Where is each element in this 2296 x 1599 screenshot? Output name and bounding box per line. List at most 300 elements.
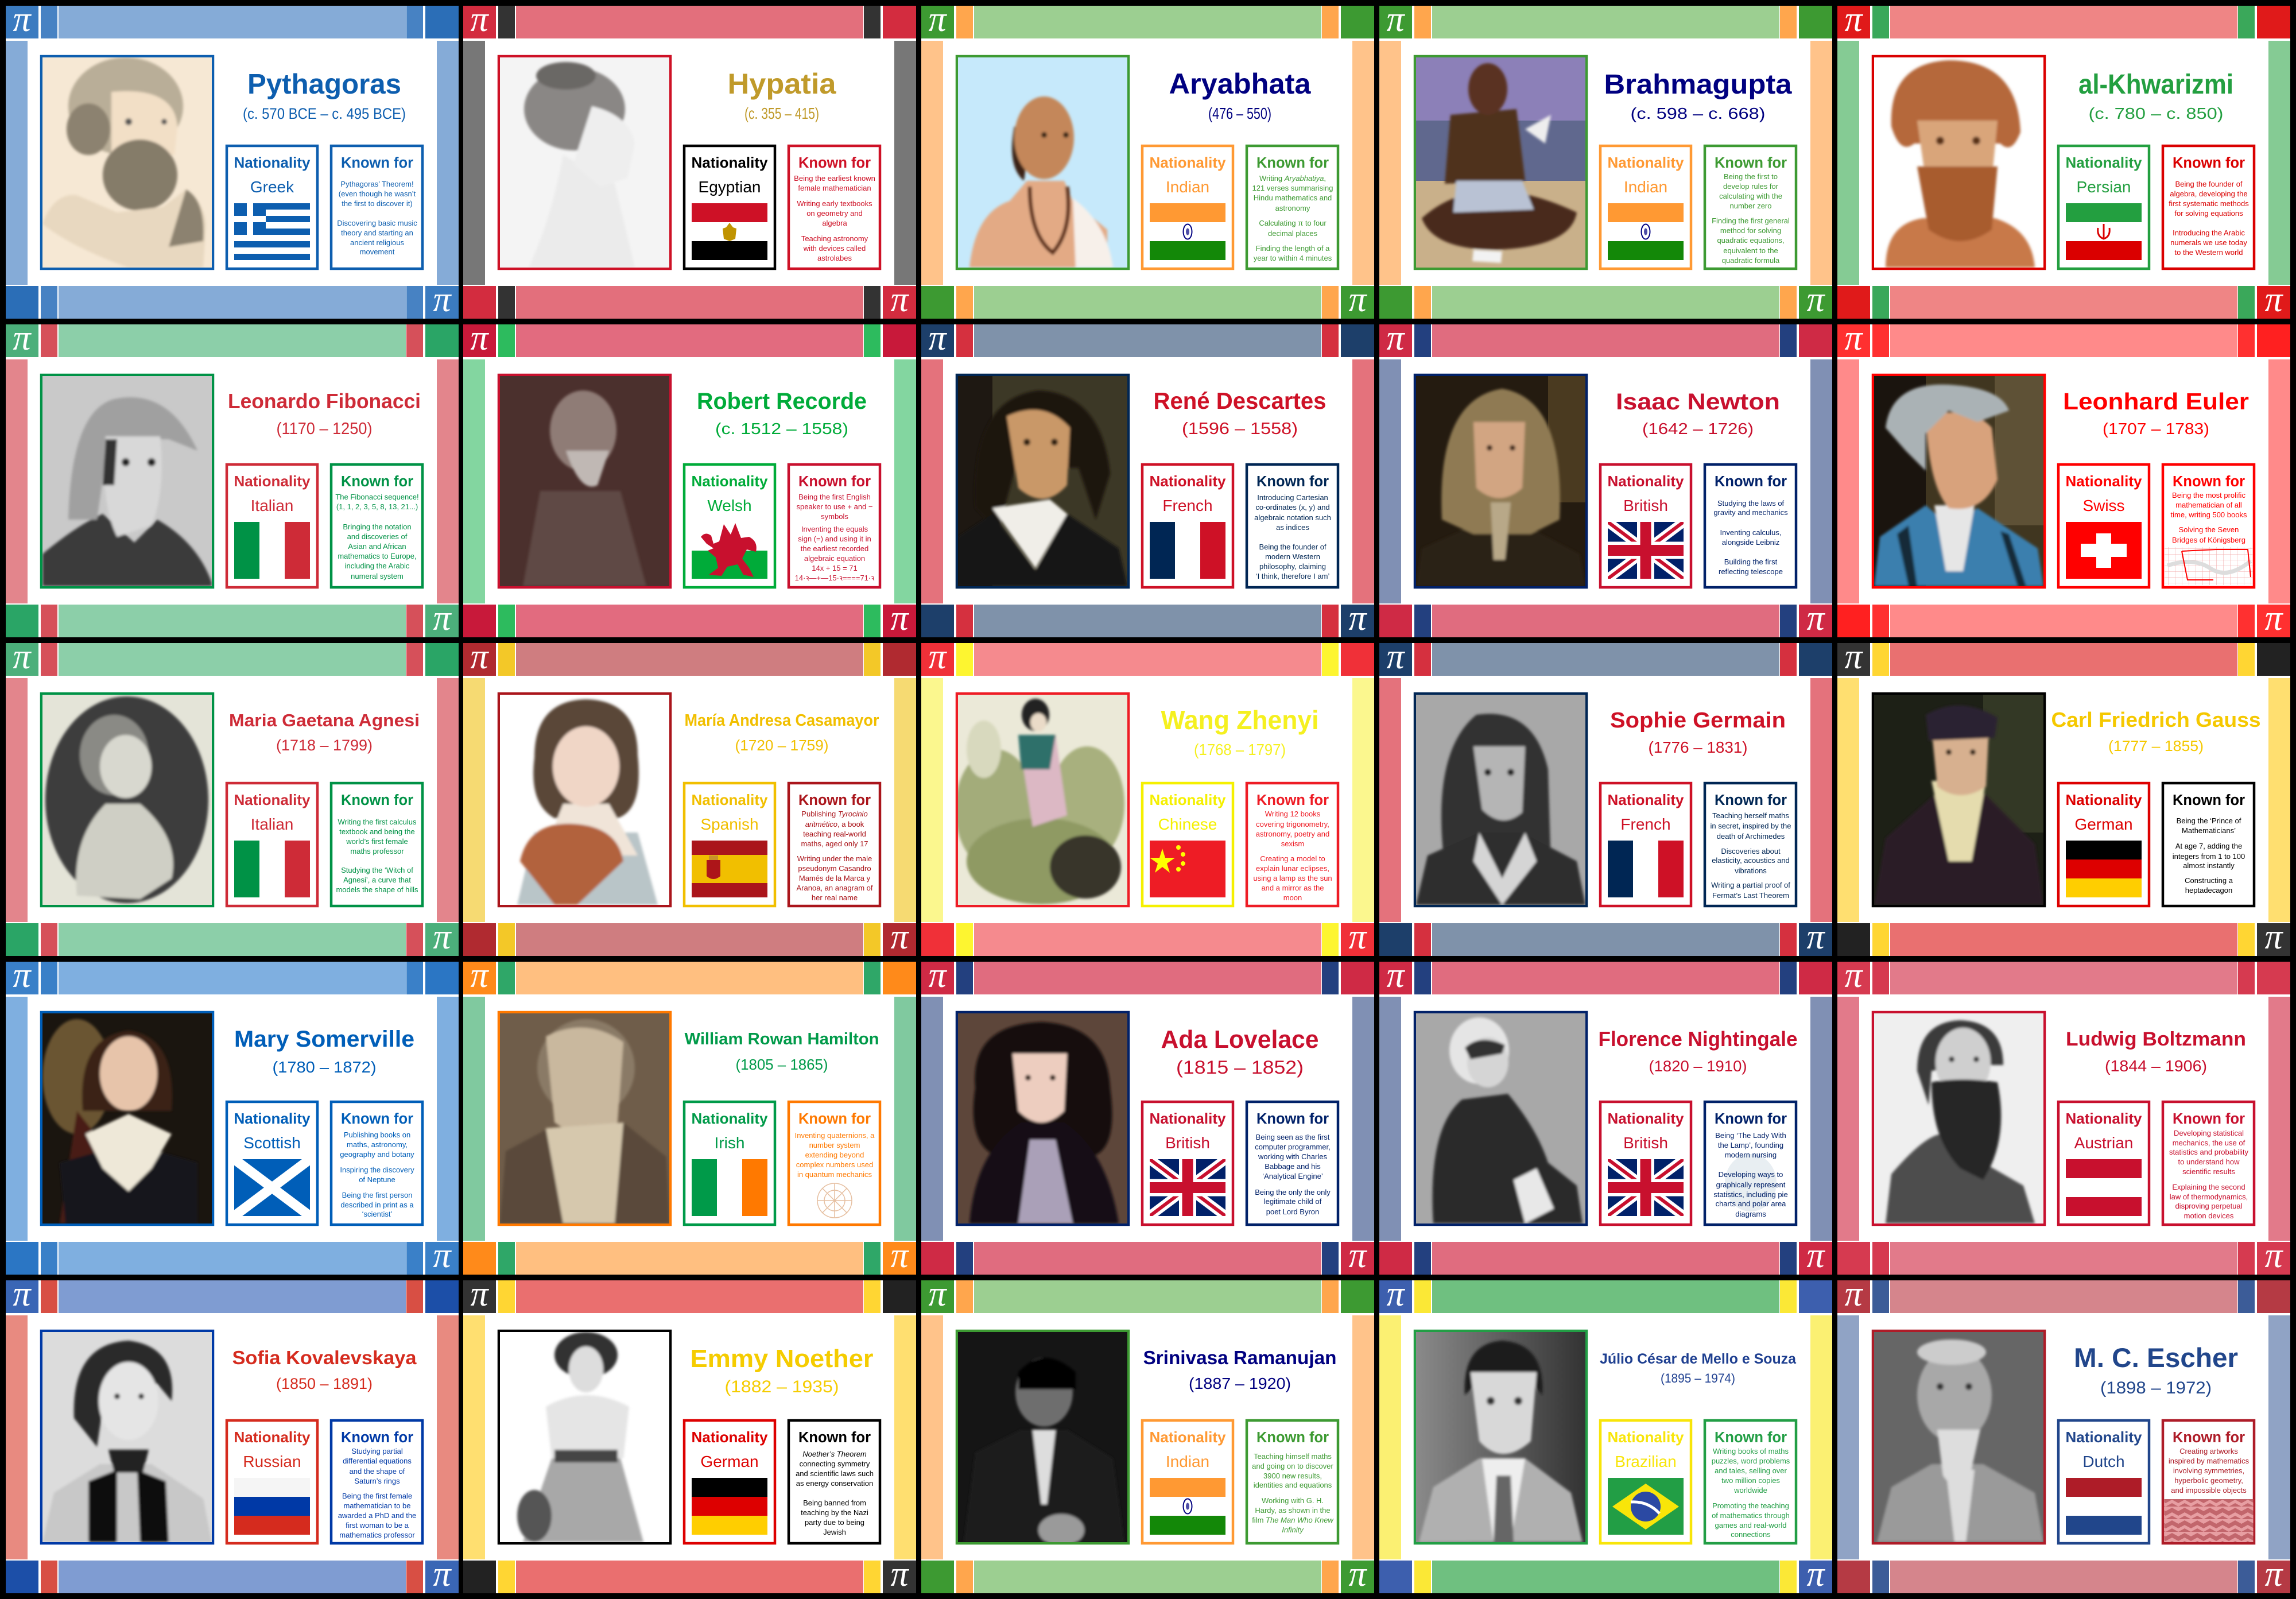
panel: known for: Bringing the notation (343, 522, 412, 531)
icon: pi top: π (13, 319, 32, 358)
panel: nationality (227, 146, 317, 269)
panel: known for: statistics, including pie (1713, 1190, 1788, 1199)
panel: known for: mathematician to be (343, 1501, 411, 1510)
panel: nationality: Nationality (234, 1110, 311, 1127)
portrait (499, 1331, 670, 1543)
frame (921, 643, 1374, 956)
panel: known for: sexism (1281, 839, 1304, 848)
panel: nationality (2058, 783, 2149, 906)
dates: (1895 – 1974) (1661, 1371, 1735, 1385)
panel: known for: gravity and mechanics (1713, 508, 1788, 517)
panel: nationality (2058, 1420, 2149, 1543)
panel: nationality (227, 464, 317, 587)
panel: known for: the earliest recorded (801, 544, 868, 553)
panel: known for: Writing 12 books (1265, 810, 1321, 818)
panel: known for: identities and equations (1254, 1481, 1332, 1489)
panel: known for: modern nursing (1725, 1151, 1777, 1159)
panel: known for: motion devices (2184, 1211, 2234, 1220)
panel: known for: and impossible objects (2171, 1486, 2247, 1495)
icon: pi top: π (1844, 1275, 1863, 1314)
icon: pi top: π (13, 0, 32, 39)
panel: known for: Known for (1715, 1111, 1787, 1127)
icon: pi bottom: π (2264, 599, 2283, 638)
name: Pythagoras (247, 69, 401, 100)
frame (921, 962, 1374, 1275)
icon: Königsberg bridges map (2165, 547, 2253, 585)
dates: (1642 – 1726) (1642, 420, 1754, 438)
panel: known for: as indices (1276, 523, 1309, 532)
name: Júlio César de Mello e Souza (1600, 1351, 1797, 1367)
panel: nationality: Nationality (234, 1428, 311, 1446)
panel: known for: to understand how (2178, 1157, 2240, 1166)
panel: known for: Fermat’s Last Theorem (1712, 891, 1789, 900)
panel: known for: Writing under the male (797, 854, 872, 863)
panel: known for: Known for (2173, 474, 2245, 490)
panel: nationality: British (1623, 1134, 1668, 1152)
panel: known for: Introducing Cartesian (1257, 493, 1328, 502)
panel: known for: games and real-world (1715, 1521, 1787, 1530)
portrait (41, 56, 213, 269)
portrait (957, 1012, 1128, 1225)
frame (1379, 962, 1832, 1275)
card: M. C. Escher (1837, 1275, 2290, 1594)
frame (1837, 6, 2290, 319)
panel: known for: Being the first English (798, 493, 871, 501)
panel: known for: computer programmer, (1255, 1143, 1331, 1151)
dates: (1882 – 1935) (724, 1377, 839, 1396)
panel: nationality: Indian (1624, 178, 1667, 196)
panel: known for: first systematic methods (2169, 199, 2249, 208)
panel: known for: Pythagoras’ Theorem! (340, 180, 414, 188)
panel: known for: statistics and probability (2169, 1148, 2249, 1156)
panel: known for: vibrations (1735, 866, 1767, 875)
panel: known for: algebraic notation such (1254, 513, 1331, 522)
frame (1837, 1280, 2290, 1593)
icon: pi top: π (13, 637, 32, 676)
panel: known for: Being the only the only (1255, 1188, 1331, 1197)
name: Sophie Germain (1610, 708, 1786, 733)
panel: known for: geography and botany (340, 1150, 414, 1159)
panel: nationality: Italian (251, 815, 293, 833)
panel: nationality: Nationality (2066, 473, 2142, 490)
panel: known for: Studying the ‘Witch of (341, 866, 413, 874)
panel: nationality: Indian (1166, 1453, 1209, 1470)
panel: known for: models the shape of hills (336, 885, 418, 894)
panel: known for: Inventing the equals (801, 525, 868, 533)
portrait (1873, 694, 2045, 906)
name: Isaac Newton (1616, 389, 1780, 415)
panel: known for: ancient religious (350, 238, 404, 247)
dates: (1776 – 1831) (1649, 738, 1747, 756)
dates: (1898 – 1972) (2100, 1379, 2212, 1397)
panel: nationality (2058, 1102, 2149, 1225)
portrait (957, 1331, 1128, 1546)
dates: (1780 – 1872) (272, 1058, 377, 1076)
icon: pi bottom: π (433, 599, 452, 638)
panel: known for: inspired by mathematics (2169, 1457, 2250, 1465)
panel: nationality: Nationality (692, 154, 768, 171)
panel: known for: numerals we use today (2170, 238, 2247, 247)
panel: known for: Known for (2173, 1430, 2245, 1446)
panel: known for: and discoveries of (347, 532, 408, 541)
panel: known for: (1, 1, 2, 3, 5, 8, 13, 21...) (336, 502, 418, 511)
portrait (1873, 1331, 2045, 1543)
panel: nationality: French (1620, 815, 1671, 833)
panel: known for: Mamés de la Marca y (799, 874, 871, 882)
portrait (955, 694, 1128, 906)
panel: known for: law of thermodynamics, (2170, 1193, 2248, 1201)
dates: (1707 – 1783) (2103, 420, 2209, 438)
panel: known for: connections (1731, 1530, 1771, 1539)
name: Carl Friedrich Gauss (2051, 708, 2260, 731)
frame (1379, 324, 1832, 637)
panel: known for: female mathematician (798, 184, 871, 192)
panel: known for: and the shape of (350, 1467, 405, 1476)
card: Maria Gaetana Agnesi (6, 637, 459, 957)
panel: known for: algebra, developing the (2170, 189, 2248, 198)
panel: nationality: Nationality (234, 791, 311, 808)
frame (921, 1280, 1374, 1593)
dates: (1805 – 1865) (736, 1056, 828, 1073)
panel: known for: Being the founder of (1259, 543, 1327, 551)
dates: (c. 598 – c. 668) (1630, 104, 1766, 122)
panel: known for: year to within 4 minutes (1254, 254, 1332, 262)
portrait (41, 1012, 213, 1225)
panel: known for: Studying partial (351, 1447, 403, 1455)
panel: known for: Solving the Seven (2179, 525, 2239, 534)
card: Robert Recorde (463, 319, 916, 638)
dates: (1887 – 1920) (1189, 1375, 1291, 1392)
panel: known for: two million copies (1721, 1476, 1780, 1485)
panel: nationality (684, 146, 775, 269)
card: María Andresa Casamayor (463, 637, 916, 957)
panel: known for: Known for (1715, 792, 1787, 808)
icon: pi bottom: π (890, 1236, 909, 1275)
name: María Andresa Casamayor (684, 711, 879, 730)
icon: pi bottom: π (890, 917, 909, 957)
panel: known for: aritmético, a book (805, 820, 864, 828)
icon: pi top: π (1386, 319, 1405, 358)
icon: pi bottom: π (1348, 917, 1367, 957)
panel: nationality (1142, 146, 1233, 269)
icon: pi bottom: π (1806, 1555, 1825, 1594)
portrait (499, 694, 670, 906)
panel: known for: party due to being (805, 1518, 864, 1527)
panel: nationality: Nationality (2066, 1428, 2142, 1446)
panel: known for (331, 464, 422, 587)
icon: pi bottom: π (1806, 280, 1825, 319)
panel: nationality (1600, 783, 1691, 906)
panel: known for: graphically represent (1716, 1180, 1786, 1189)
panel: known for: the first to discover it) (342, 199, 413, 208)
panel: nationality: Nationality (692, 1428, 768, 1446)
panel: known for: Creating a model to (1260, 854, 1325, 863)
panel: known for: diagrams (1735, 1210, 1766, 1218)
frame (463, 324, 916, 637)
panel: known for: Known for (798, 474, 871, 490)
name: Brahmagupta (1604, 69, 1792, 100)
panel: known for: number system (809, 1141, 860, 1149)
panel: nationality (227, 1102, 317, 1225)
name: M. C. Escher (2074, 1342, 2238, 1373)
panel: known for: extending beyond (805, 1151, 864, 1159)
panel: known for: alongside Leibniz (1722, 538, 1779, 547)
name: René Descartes (1154, 388, 1326, 414)
name: Florence Nightingale (1598, 1027, 1798, 1051)
card: René Descartes (921, 319, 1374, 638)
panel: nationality: French (1162, 497, 1213, 514)
name: Srinivasa Ramanujan (1143, 1347, 1336, 1368)
portrait (1415, 56, 1587, 269)
panel: known for: Babbage and his (1265, 1162, 1321, 1171)
panel: known for (1705, 146, 1796, 269)
panel: known for (1705, 1102, 1796, 1225)
panel: known for (1247, 1102, 1338, 1225)
panel: known for: Teaching himself maths (1254, 1452, 1332, 1461)
panel: known for: Being the earliest known (794, 174, 875, 183)
panel: known for: teaching by the Nazi (801, 1508, 868, 1517)
icon: pi bottom: π (433, 1555, 452, 1594)
dates: (1596 – 1558) (1182, 420, 1298, 438)
panel: known for (331, 1102, 422, 1225)
panel: known for: integers from 1 to 100 (2173, 852, 2245, 861)
panel: known for: philosophy, claiming (1259, 562, 1326, 571)
panel: known for (2163, 146, 2254, 269)
panel: nationality: Brazilian (1615, 1453, 1677, 1470)
panel: known for: Teaching herself maths (1712, 811, 1789, 820)
panel: nationality (1142, 1420, 1233, 1543)
panel: nationality: Welsh (707, 497, 752, 514)
icon: pi bottom: π (2264, 1555, 2283, 1594)
dates: (1718 – 1799) (276, 737, 373, 754)
card: al-Khwarizmi (1837, 0, 2290, 319)
icon: pi bottom: π (1348, 1236, 1367, 1275)
name: Hypatia (728, 68, 837, 100)
portrait (1873, 56, 2045, 269)
panel: nationality: Nationality (234, 154, 311, 171)
panel: known for: scientific results (2182, 1167, 2235, 1176)
name: Sofia Kovalevskaya (232, 1347, 417, 1368)
panel: known for: explain lunar eclipses, (1256, 864, 1329, 873)
icon: pi top: π (470, 637, 489, 676)
panel: known for: Discovering basic music (337, 219, 417, 227)
panel: known for: using a lamp as the sun (1253, 874, 1332, 882)
panel: nationality (2058, 146, 2149, 269)
panel: known for: hyperbolic geometry, (2174, 1476, 2243, 1485)
portrait (499, 1012, 670, 1225)
card: Srinivasa Ramanujan (921, 1275, 1374, 1594)
icon: pi top: π (928, 637, 947, 676)
panel: known for (789, 1102, 880, 1225)
panel: nationality: Scottish (243, 1134, 301, 1152)
panel: known for: Being the ‘Prince of (2177, 816, 2241, 825)
panel: known for (789, 783, 880, 906)
icon: pi top: π (928, 319, 947, 358)
frame (463, 962, 916, 1275)
panel: nationality: Austrian (2074, 1134, 2133, 1152)
panel: nationality: Nationality (1608, 791, 1684, 808)
panel: nationality: Nationality (692, 791, 768, 808)
name: Aryabhata (1169, 68, 1312, 100)
panel: nationality: German (700, 1453, 759, 1470)
panel: known for: Known for (1715, 474, 1787, 490)
icon: pi top: π (1386, 1275, 1405, 1314)
panel: nationality: Nationality (234, 473, 311, 490)
name: Wang Zhenyi (1161, 705, 1319, 735)
card: Sofia Kovalevskaya (6, 1275, 459, 1594)
panel: known for: Writing the first calculus (338, 818, 417, 826)
dates: (1170 – 1250) (277, 420, 372, 438)
panel: nationality (1142, 783, 1233, 906)
panel: nationality (684, 1102, 775, 1225)
panel: known for: Introducing the Arabic (2173, 229, 2245, 237)
frame (6, 1280, 459, 1593)
card: Emmy Noether (463, 1275, 916, 1594)
panel: known for: sign (=) and using it in (798, 535, 871, 543)
panel: known for (2163, 464, 2254, 587)
panel: known for: the Lamp’, founding (1718, 1141, 1783, 1149)
panel: nationality: Italian (251, 497, 293, 514)
panel: known for: as energy conservation (796, 1479, 873, 1488)
icon: pi top: π (13, 956, 32, 995)
panel: nationality (1600, 1420, 1691, 1543)
panel: known for: charts and polar area (1716, 1199, 1786, 1208)
panel: known for: Agnesi’, a curve that (343, 876, 411, 884)
panel: known for (2163, 1102, 2254, 1225)
panel: known for: 3900 new results, (1263, 1472, 1322, 1480)
panel: known for: pseudonym Casandro (798, 864, 871, 873)
frame (921, 6, 1374, 319)
icon: pi top: π (1386, 637, 1405, 676)
panel: known for: Known for (1256, 155, 1329, 171)
panel: known for: in secret, inspired by the (1711, 822, 1791, 830)
panel: known for: Mathematicians’ (2182, 826, 2236, 835)
panel: nationality (227, 1420, 317, 1543)
icon: pi bottom: π (433, 1236, 452, 1275)
panel: known for: Known for (2173, 155, 2245, 171)
portrait (1873, 375, 2045, 587)
frame (463, 643, 916, 956)
panel: known for: Known for (798, 792, 871, 808)
icon: tessellation (2164, 1499, 2254, 1542)
panel: known for: reflecting telescope (1719, 567, 1783, 576)
card: Ada Lovelace (921, 956, 1374, 1275)
icon: quaternion diagram (817, 1183, 852, 1218)
dates: (1820 – 1910) (1649, 1058, 1747, 1075)
dates: (476 – 550) (1208, 104, 1271, 122)
panel: nationality: Greek (250, 178, 294, 196)
panel: nationality: Nationality (2066, 154, 2142, 171)
portrait (41, 1331, 213, 1543)
panel: nationality: Nationality (1150, 791, 1226, 808)
dates: (1777 – 1855) (2108, 737, 2204, 754)
frame (1837, 962, 2290, 1275)
panel: known for: Noether’s Theorem (802, 1450, 867, 1458)
panel: known for: Jewish (823, 1528, 846, 1536)
panel: known for: puzzles, word problems (1712, 1457, 1790, 1465)
icon: pi top: π (1844, 956, 1863, 995)
panel: known for: mathematician of all (2175, 501, 2242, 509)
panel: known for: Being seen as the first (1256, 1133, 1330, 1141)
icon: pi top: π (928, 0, 947, 39)
panel: nationality: Indian (1166, 178, 1209, 196)
panel: known for: time, writing 500 books (2171, 510, 2247, 519)
card: Leonardo Fibonacci (6, 319, 459, 638)
card: Brahmagupta (1379, 0, 1832, 319)
panel: known for: Finding the length of a (1256, 244, 1330, 253)
panel: known for: moon (1283, 893, 1302, 902)
panel: known for: Being the first person (342, 1191, 412, 1199)
dates: (c. 1512 – 1558) (715, 420, 848, 438)
panel: known for: Hardy, as shown in the (1255, 1506, 1331, 1515)
panel: known for: symbols (821, 512, 848, 521)
panel: known for: algebra (822, 219, 847, 227)
panel: nationality (684, 783, 775, 906)
panel: known for: Writing books of maths (1713, 1447, 1789, 1455)
panel: known for (1247, 146, 1338, 269)
panel: known for: Known for (1715, 155, 1787, 171)
panel: known for: 14·ꝛ—+—15·ꝛ====71·ꝛ (795, 574, 875, 582)
dates: (1844 – 1906) (2105, 1057, 2207, 1075)
panel: known for: Known for (1256, 792, 1329, 808)
icon: pi bottom: π (2264, 1236, 2283, 1275)
name: William Rowan Hamilton (684, 1030, 879, 1048)
panel: known for: maths, astronomy, (347, 1140, 408, 1149)
name: Emmy Noether (690, 1345, 874, 1373)
panel: nationality: Egyptian (699, 178, 761, 196)
panel: known for: Infinity (1282, 1526, 1304, 1534)
panel: nationality (1600, 464, 1691, 587)
icon: pi bottom: π (890, 280, 909, 319)
panel: known for (789, 146, 880, 269)
icon: pi top: π (470, 956, 489, 995)
panel: known for: Being ‘The Lady With (1715, 1131, 1786, 1140)
panel: known for (1247, 464, 1338, 587)
portrait (957, 56, 1128, 269)
portrait (499, 375, 670, 587)
icon: pi bottom: π (1806, 599, 1825, 638)
panel: nationality (1142, 1102, 1233, 1225)
card: Sophie Germain (1379, 637, 1832, 957)
panel: known for (331, 783, 422, 906)
panel: known for: number zero (1730, 202, 1771, 210)
icon: pi bottom: π (1806, 917, 1825, 957)
panel: known for: first woman to be a (346, 1521, 409, 1530)
panel: known for: co-ordinates (x, y) and (1255, 503, 1330, 512)
panel: known for: ‘I think, therefore I am’ (1256, 572, 1329, 580)
dates: (c. 780 – c. 850) (2088, 104, 2224, 122)
card: William Rowan Hamilton (463, 956, 916, 1275)
panel: known for: decimal places (1268, 229, 1317, 238)
panel: known for: calculating with the (1719, 192, 1782, 200)
panel: known for: Asian and African (348, 542, 406, 551)
panel: nationality (2058, 464, 2149, 587)
panel: known for: Known for (1256, 474, 1329, 490)
panel: known for: Studying the laws of (1717, 499, 1785, 508)
panel: known for: Developing ways to (1719, 1170, 1783, 1179)
panel: known for: and a mirror as the (1261, 884, 1324, 892)
panel: known for: astrolabes (817, 254, 852, 262)
panel: nationality: British (1165, 1134, 1210, 1152)
card: Wang Zhenyi (921, 637, 1374, 957)
panel: nationality: Nationality (1608, 473, 1684, 490)
panel: known for: teaching real-world (803, 830, 866, 838)
panel: known for: involving symmetries, (2173, 1466, 2244, 1475)
panel: known for: awarded a PhD and the (338, 1511, 416, 1520)
panel: known for: legitimate child of (1264, 1197, 1322, 1206)
card: Isaac Newton (1379, 319, 1832, 638)
card: Pythagoras (6, 0, 459, 319)
